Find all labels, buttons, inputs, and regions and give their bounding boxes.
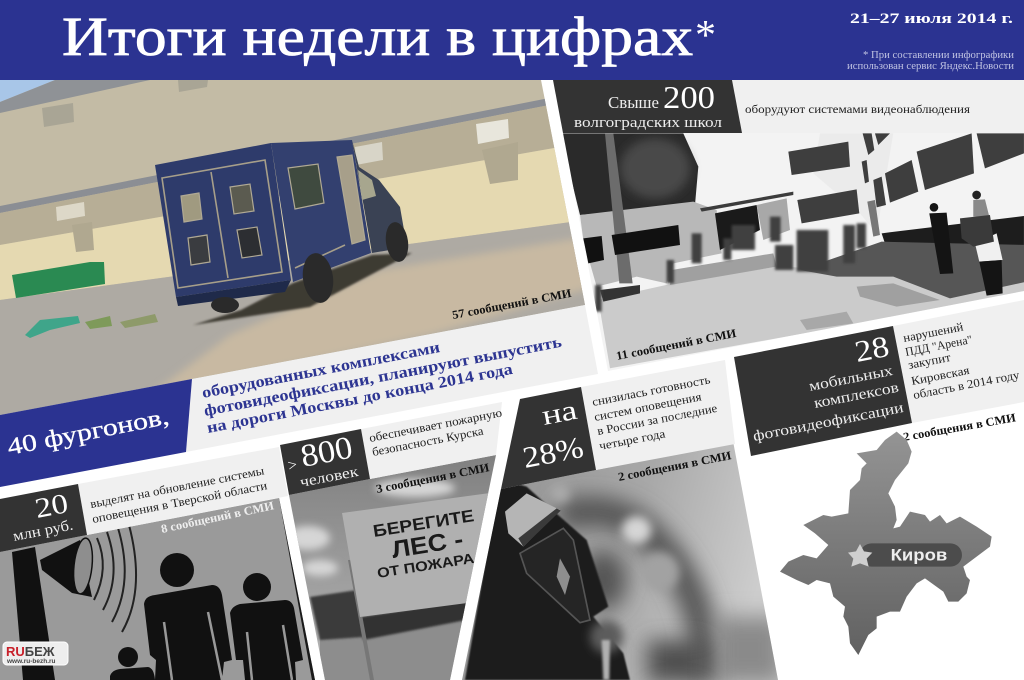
post <box>12 547 55 680</box>
blue label <box>0 379 192 487</box>
tree line <box>310 590 363 640</box>
figure: 28 <box>852 330 892 369</box>
photo caption: 2 сообщения в СМИ <box>617 448 733 484</box>
sleeve <box>465 480 630 680</box>
van bumper <box>176 280 291 306</box>
panel: rescuer label <box>501 360 735 489</box>
sign text <box>372 506 475 581</box>
paving light <box>598 267 1024 368</box>
logo <box>3 642 68 665</box>
logo: www.ru-bezh.ru <box>6 658 56 665</box>
badge <box>520 528 590 623</box>
panel: siren photo <box>0 490 330 680</box>
description <box>201 334 564 437</box>
lower wing <box>580 202 722 287</box>
description: Кировская <box>910 363 971 388</box>
figures: Свыше <box>608 93 659 112</box>
man with bag <box>960 191 1003 296</box>
dark box <box>734 326 912 456</box>
medium person <box>230 573 303 680</box>
steps <box>670 253 777 285</box>
panel: forest photo <box>280 440 510 680</box>
badge emblem <box>557 558 570 595</box>
figure: 800 <box>297 429 355 474</box>
map: Kirov region <box>780 432 992 655</box>
unit: млн руб. <box>12 518 75 545</box>
asterisk: * <box>695 13 716 59</box>
photo caption: 57 сообщений в СМИ <box>451 286 573 322</box>
frame edge <box>279 498 318 680</box>
description: на дороги Москвы до конца 2014 года <box>206 361 514 437</box>
entrance <box>715 205 760 250</box>
description: область в 2014 году <box>912 368 1021 402</box>
clouds <box>286 479 455 576</box>
Kirov mentions caption: 2 сообщения в СМИ <box>902 410 1017 444</box>
description: оборудованных комплексами <box>201 339 441 402</box>
van side <box>271 140 371 282</box>
wall shaded <box>0 106 554 245</box>
man <box>929 203 953 274</box>
dark box <box>553 80 742 133</box>
crowd <box>595 217 866 312</box>
photo caption: 11 сообщений в СМИ <box>615 326 738 363</box>
cab window <box>358 170 376 200</box>
panel: forest label <box>280 402 503 495</box>
door <box>867 200 880 237</box>
description: нарушений <box>902 319 965 345</box>
bush <box>600 285 640 302</box>
description: ПДД "Арена" <box>904 332 973 359</box>
units: комплексов <box>813 380 900 412</box>
panel: school photo <box>560 130 1024 377</box>
dark box <box>501 387 596 489</box>
van doors frame <box>162 160 345 288</box>
units: фотовидеофиксации <box>752 400 905 445</box>
shadow on wall <box>73 228 94 252</box>
description: выделят на обновление системы <box>89 463 265 511</box>
photo caption: 8 сообщений в СМИ <box>160 498 276 536</box>
panel: school label: волгоградских школ <box>574 115 722 131</box>
school windows <box>788 133 1024 223</box>
source note: использован сервис Яндекс.Новости <box>847 61 1015 72</box>
description: снизилась готовность <box>591 372 712 409</box>
figure leg gaps <box>164 612 292 680</box>
sign text: ОТ ПОЖАРА <box>376 550 475 581</box>
panel: Kirov label <box>734 300 1024 456</box>
wall base <box>882 216 1024 247</box>
panel: van photo <box>0 80 600 420</box>
source note <box>847 50 1015 72</box>
label text: 40 фургонов, <box>5 404 171 461</box>
description: обеспечивает пожарную <box>368 405 503 445</box>
source note: * При составлении инфографики <box>863 50 1015 61</box>
green containers <box>12 262 105 298</box>
description <box>368 405 503 459</box>
percent: 28% <box>520 431 586 475</box>
shaded facade <box>813 133 893 233</box>
description: закупит <box>907 350 953 372</box>
ground <box>0 218 600 420</box>
sign text: БЕРЕГИТЕ <box>372 506 475 541</box>
header <box>0 0 1024 80</box>
date: 21–27 июля 2014 г. <box>850 11 1013 27</box>
van rear <box>155 143 291 297</box>
tree <box>560 133 698 215</box>
dark box <box>280 429 370 495</box>
description <box>902 319 1021 402</box>
panel: van text band <box>0 305 598 487</box>
tree trunk <box>605 133 633 283</box>
dark box <box>0 484 87 552</box>
lower wing windows <box>612 225 680 255</box>
wall air conditioners <box>42 80 509 221</box>
sign post <box>348 560 374 680</box>
unit: человек <box>299 464 360 491</box>
description: оповещения в Тверской области <box>91 478 269 526</box>
figure: 20 <box>32 488 71 525</box>
sky <box>0 80 55 102</box>
green net <box>25 316 80 338</box>
star <box>848 544 872 567</box>
panel: rescuer photo <box>455 435 785 680</box>
units <box>752 363 905 445</box>
microphone <box>590 620 623 653</box>
shaded paving <box>800 242 1024 298</box>
panel: siren label <box>0 447 288 552</box>
van shadow <box>193 253 412 325</box>
flag patch <box>505 493 560 547</box>
wall lit <box>0 140 600 300</box>
title: Итоги недели в цифрах <box>62 6 693 67</box>
description <box>89 463 269 526</box>
units: мобильных <box>808 363 895 395</box>
panel: school label: 200 <box>663 79 715 115</box>
large person <box>144 553 232 680</box>
sound waves <box>94 525 136 632</box>
city name: Киров <box>891 546 947 565</box>
horn <box>40 537 95 597</box>
logo: RUБЕЖ <box>6 644 55 659</box>
blurred background objects <box>550 484 783 680</box>
van cab <box>352 140 407 253</box>
preposition: на <box>539 395 580 432</box>
description: четыре года <box>598 426 667 453</box>
small person <box>110 647 155 680</box>
description: в России за последние <box>596 401 718 438</box>
roof <box>0 80 150 113</box>
grass <box>320 600 500 680</box>
panel: school label <box>553 79 1024 133</box>
description: оборудуют системами видеонаблюдения <box>745 102 971 116</box>
sign board <box>342 493 490 617</box>
canopy <box>700 192 793 212</box>
sign text: ЛЕС - <box>390 526 465 564</box>
city pill <box>860 543 962 567</box>
description: фотовидеофиксации, планируют выпустить <box>203 334 564 420</box>
wall stripe <box>0 98 546 213</box>
van windows <box>181 155 365 265</box>
description <box>591 372 718 453</box>
photo caption: 3 сообщения в СМИ <box>375 460 491 496</box>
van wheels <box>211 221 411 313</box>
description: безопасность Курска <box>371 424 485 459</box>
greater-than sign: > <box>287 457 299 475</box>
description: систем оповещения <box>593 389 703 424</box>
dirt <box>162 238 582 384</box>
